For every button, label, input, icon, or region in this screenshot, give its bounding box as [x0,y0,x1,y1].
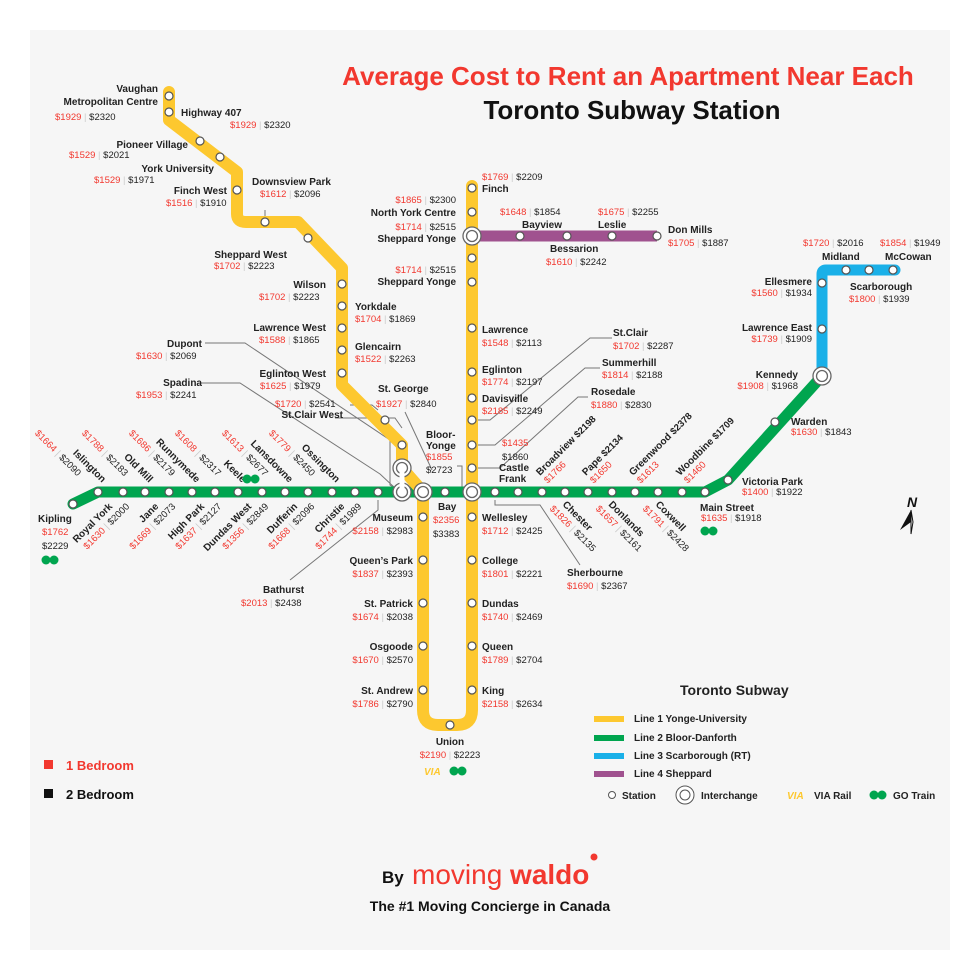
labels line 1 west: $1702 | $2223 [214,261,275,272]
labels line 3 and east: $1739 | $1909 [751,334,812,345]
labels line 1 Yonge: $1880 | $2830 [591,400,652,411]
labels line 1 west: Spadina [163,378,202,389]
labels line 2 west below: Christie [313,501,347,535]
labels line 3 and east [700,238,941,536]
labels line 1 Yonge: Frank [499,474,527,485]
labels line 2 west above: Lansdowne [248,438,295,485]
labels line 2 west below: $1744 | $1989 [313,501,364,552]
labels line 3 and east: McCowan [885,252,932,263]
labels line 1 west: $1612 | $2096 [260,189,321,200]
legend: bedrooms: 2 Bedroom [66,787,134,802]
labels line 2 west above: Islington [70,448,108,485]
labels line 2 east: Pape $2134 [580,432,626,478]
labels line 2 east [534,411,745,554]
line 4 Sheppard [472,230,657,242]
north arrow [900,494,918,534]
legend: lines: Toronto Subway [680,682,789,698]
labels line 1 Yonge: $2723 [426,465,452,476]
labels line 2 west above: Keele [221,458,248,485]
legend: lines: Station [622,791,656,802]
labels line 3 and east: $1908 | $1968 [737,381,798,392]
labels line 1 west: St. George [378,384,429,395]
labels line 3 and east: Warden [791,417,827,428]
labels line 1 south: $2158 | $2983 [352,526,413,537]
labels line 1 Yonge: Wellesley [482,513,528,524]
labels line 1 south: $1837 | $2393 [352,569,413,580]
labels line 3 and east: Lawrence East [742,323,813,334]
labels line 3 and east: $1400 | $1922 [742,487,803,498]
labels line 2 east: $1613 [635,459,662,486]
labels line 3 and east: $1854 | $1949 [880,238,941,249]
labels line 1 west: $1720 | $2541 [275,399,336,410]
labels line 1 west: St.Clair West [282,410,344,421]
labels line 3 and east: Ellesmere [765,277,812,288]
labels line 1 Yonge: $1435 [502,438,528,449]
labels line 1 west: Wilson [293,280,326,291]
labels line 1 Yonge: North York Centre [371,208,456,219]
labels line 2 east: Woodbine $1709 [674,416,737,478]
labels line 1 west: $1929 | $2320 [230,120,291,131]
labels line 1 Yonge: Sheppard Yonge [377,234,456,245]
labels line 1 west [55,84,437,421]
labels line 3 and east: Kennedy [756,370,798,381]
labels line 2 west above: Old Mill [121,452,155,485]
labels line 1 Yonge: $1801 | $2221 [482,569,543,580]
labels line 2 west below: $1637 | $2127 [173,501,224,552]
labels line 1 west: Yorkdale [355,302,397,313]
labels line 1 west: Lawrence West [253,323,327,334]
legend: lines: VIA [787,791,804,802]
interchanges [393,227,831,501]
labels line 1 Yonge: $1774 | $2197 [482,377,543,388]
labels line 1 Yonge: $1690 | $2367 [567,581,628,592]
labels line 1 Yonge: $1740 | $2469 [482,612,543,623]
labels line 2 west above: $1613 | $2677 [219,428,270,479]
title: Toronto Subway Station [483,95,781,125]
labels line 1 Yonge: Davisville [482,394,529,405]
labels line 3 and east: $1630 | $1843 [791,427,852,438]
labels line 1 Yonge: Eglinton [482,365,522,376]
labels line 2 west above: Ossington [299,442,342,485]
labels line 2 west above: $1608 | $2317 [172,428,223,479]
labels line 1 Yonge: Dundas [482,599,519,610]
labels line 2 west below [38,493,364,609]
labels line 2 east: $1766 [542,459,569,486]
labels line 1 Yonge: Castle [499,463,529,474]
labels line 1 west: $1529 | $1971 [94,175,155,186]
labels line 2 west below: $1669 | $2073 [127,501,178,552]
labels line 1 south: Queen’s Park [349,556,413,567]
labels line 1 Yonge: $2158 | $2634 [482,699,543,710]
labels line 1 Yonge: Yonge [426,441,456,452]
labels line 3 and east: $1800 | $1939 [849,294,910,305]
labels line 1 Yonge: $1855 [426,452,452,463]
labels line 2 west below: $1668 | $2096 [266,501,317,552]
line 3 Scarborough [822,270,895,376]
legend: lines: Line 3 Scarborough (RT) [634,751,751,762]
labels line 1 Yonge: Summerhill [602,358,657,369]
labels line 1 south: St. Patrick [364,599,413,610]
labels line 1 west: Finch West [174,186,228,197]
labels line 1 west: $1630 | $2069 [136,351,197,362]
labels line 1 Yonge: $2185 | $2249 [482,406,543,417]
title [342,61,914,125]
legend: bedrooms [44,758,134,802]
labels line 1 west: Downsview Park [252,177,331,188]
labels line 1 west: Sheppard West [214,250,288,261]
labels line 1 Yonge: $1714 | $2515 [395,222,456,233]
legend: lines: GO Train [893,791,935,802]
labels line 4: Bayview [522,220,562,231]
labels line 2 west below: Dufferin [265,501,300,536]
labels line 1 south: Bay [438,502,457,513]
labels line 1 south [349,502,480,778]
labels line 2 east: Coxwell [653,499,688,534]
labels line 1 west: Dupont [167,339,203,350]
branding [370,854,610,914]
labels line 3 and east: $1635 | $1918 [701,513,762,524]
labels line 1 Yonge: King [482,686,504,697]
labels line 1 west: $1704 | $1869 [355,314,416,325]
labels line 2 west above [32,419,342,495]
labels line 2 east: $1791 | $2428 [640,504,691,554]
labels line 1 Yonge: $1769 | $2209 [482,172,543,183]
labels line 3 and east: $1560 | $1934 [751,288,812,299]
labels line 1 south: St. Andrew [361,686,413,697]
legend: lines: Line 4 Sheppard [634,769,712,780]
labels line 4: Leslie [598,220,627,231]
labels line 3 and east: Midland [822,252,860,263]
labels line 1 Yonge: $1860 [502,452,528,463]
labels line 2 west below: Dundas West [202,501,255,554]
labels line 1 Yonge: Sherbourne [567,568,624,579]
labels line 1 west: Eglinton West [260,369,327,380]
labels line 4: Bessarion [550,244,598,255]
labels line 2 east: $1657 | $2161 [593,504,644,554]
labels line 1 west: $1702 | $2223 [259,292,320,303]
labels line 1 south: $1786 | $2790 [352,699,413,710]
labels line 2 west above: $1686 | $2179 [126,428,177,479]
labels line 3 and east: Victoria Park [742,477,803,488]
labels line 1 west: Vaughan [116,84,158,95]
labels line 3 and east: $1720 | $2016 [803,238,864,249]
labels line 1 Yonge: $1712 | $2425 [482,526,543,537]
labels line 2 west above: $1664 | $2090 [32,428,83,479]
labels line 1 west: Glencairn [355,342,401,353]
labels line 1 west: $1588 | $1865 [259,335,320,346]
stations [69,92,897,729]
legend: lines: VIA Rail [814,791,852,802]
labels line 1 west: $1625 | $1979 [260,381,321,392]
labels line 1 Yonge [371,172,674,710]
labels line 3 and east: Scarborough [850,282,912,293]
branding: moving waldo [412,859,589,890]
labels line 2 east: Broadview $2198 [534,414,599,478]
labels line 1 Yonge: Sheppard Yonge [377,277,456,288]
labels line 4: $1610 | $2242 [546,257,607,268]
labels line 1 south: $1674 | $2038 [352,612,413,623]
labels line 1 west: Pioneer Village [116,140,188,151]
labels line 2 west below: Kipling [38,514,72,525]
line 2 Bloor-Danforth [73,376,822,504]
labels line 2 east: Chester [560,499,594,534]
labels line 2 west above: $1788 | $2183 [79,428,130,479]
labels line 2 east: Donlands [606,499,646,540]
labels line 1 south: $1670 | $2570 [352,655,413,666]
labels line 2 west below: Royal York [71,501,115,545]
labels line 1 Yonge: $1714 | $2515 [395,265,456,276]
labels line 2 east: $1826 | $2135 [547,504,598,554]
labels line 2 east: $1650 [588,459,615,486]
labels line 2 west below: $1762 [42,527,68,538]
labels line 1 Yonge: Rosedale [591,387,636,398]
labels line 4: Don Mills [668,225,713,236]
labels line 1 south: Museum [372,513,413,524]
legend: lines [594,682,935,804]
labels line 4: $1648 | $1854 [500,207,561,218]
labels line 1 south: Osgoode [370,642,413,653]
legend: bedrooms: 1 Bedroom [66,758,134,773]
branding: By [382,868,404,887]
labels line 1 Yonge: St.Clair [613,328,648,339]
labels line 2 west below: $2229 [42,541,68,552]
legend: lines: Interchange [701,791,758,802]
labels line 2 west below: $1356 | $2849 [220,501,271,552]
labels line 2 west above: $1779 | $2450 [266,428,317,479]
labels line 1 Yonge: Finch [482,184,509,195]
labels line 4 [500,207,729,268]
labels line 1 west: $1927 | $2840 [376,399,437,410]
labels line 1 Yonge: College [482,556,519,567]
labels line 1 south: Union [436,737,464,748]
labels line 1 west: $1522 | $2263 [355,354,416,365]
labels line 1 Yonge: $1702 | $2287 [613,341,674,352]
labels line 4: $1675 | $2255 [598,207,659,218]
branding: The #1 Moving Concierge in Canada [370,898,610,914]
labels line 1 west: $1516 | $1910 [166,198,227,209]
labels line 1 west: $1529 | $2021 [69,150,130,161]
labels line 1 west: $1953 | $2241 [136,390,197,401]
line 1 Yonge-University [169,92,472,725]
labels line 2 east: Greenwood $2378 [627,411,695,478]
labels line 2 west below: Bathurst [263,585,305,596]
legend: lines: Line 2 Bloor-Danforth [634,733,737,744]
labels line 2 west below: $1630 | $2000 [81,501,132,552]
labels line 2 west below: $2013 | $2438 [241,598,302,609]
legend: lines: Line 1 Yonge-University [634,714,747,725]
labels line 2 west above: Runnymede [153,437,202,485]
labels line 2 west below: High Park [166,501,207,542]
labels line 2 east: $1460 [682,459,709,486]
labels line 4: $1705 | $1887 [668,238,729,249]
title: Average Cost to Rent an Apartment Near Each [342,61,914,91]
labels line 1 Yonge: Queen [482,642,513,653]
labels line 1 south: VIA [424,767,441,778]
labels line 2 west below: Jane [137,501,161,525]
labels line 1 Yonge: $1814 | $2188 [602,370,663,381]
labels line 1 Yonge: Bloor- [426,430,455,441]
labels line 1 Yonge: $1789 | $2704 [482,655,543,666]
labels line 1 south: $2356 [433,515,459,526]
north arrow: N [907,494,918,510]
labels line 1 west: Metropolitan Centre [64,97,158,108]
labels line 1 Yonge: $1548 | $2113 [482,338,542,349]
labels line 1 Yonge: Lawrence [482,325,529,336]
labels line 1 west: Highway 407 [181,108,242,119]
labels line 1 west: York University [141,164,214,175]
leader lines [200,210,612,580]
labels line 1 west: $1929 | $2320 [55,112,116,123]
labels line 1 south: $3383 [433,529,459,540]
labels line 1 south: $2190 | $2223 [420,750,480,761]
labels line 1 Yonge: $1865 | $2300 [395,195,456,206]
labels line 3 and east: Main Street [700,503,755,514]
